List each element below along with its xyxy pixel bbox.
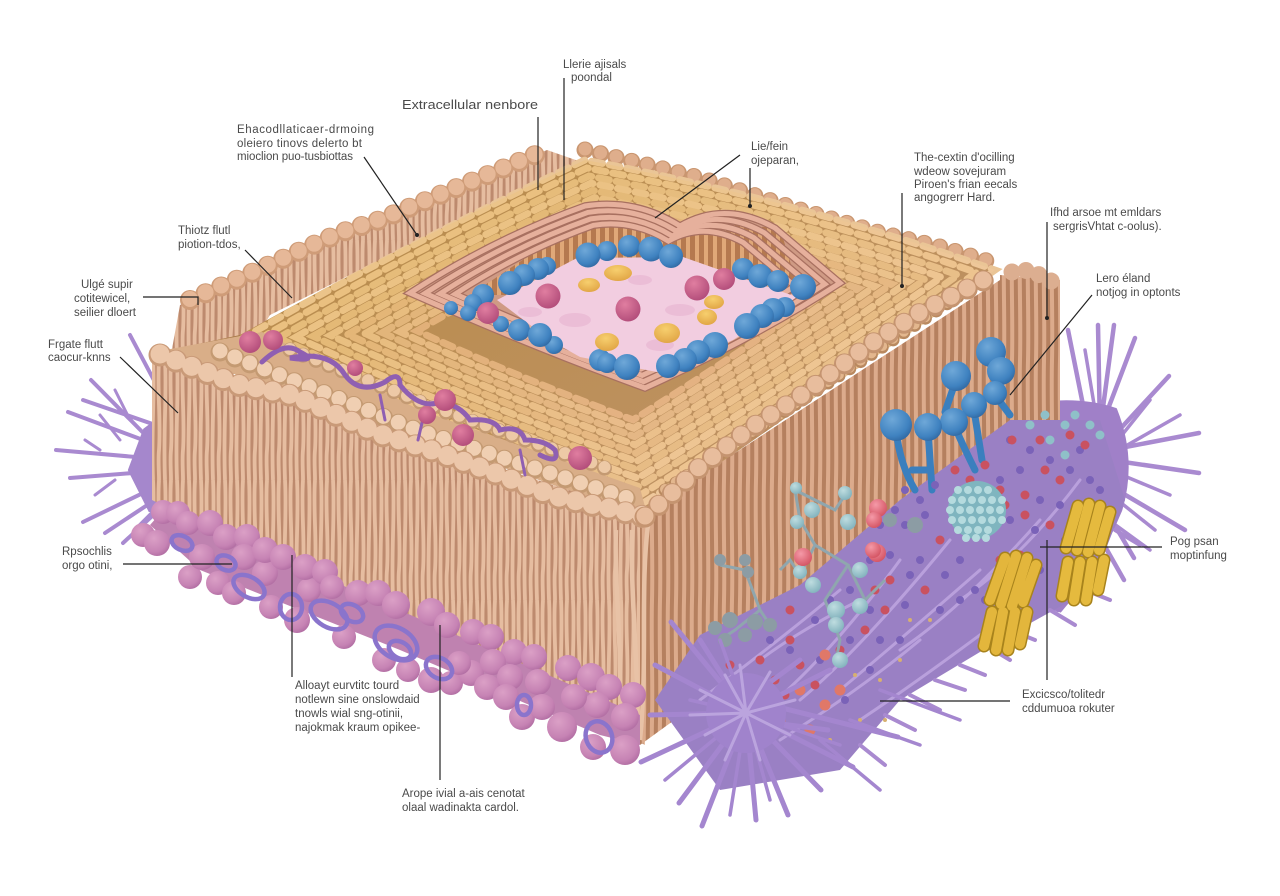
label: base spheres: orgo otini,: [62, 560, 113, 572]
label: left heads: Ulgé supir: [81, 279, 133, 291]
panel: front-left wall of lipid tails: [152, 355, 645, 745]
burst: lower purple receptor spikes: [641, 622, 960, 826]
panel: pink tube folds around the central well: [410, 204, 840, 388]
label: upper right four-line: wdeow sovejuram: [913, 166, 1006, 178]
heads: front-left rim phospholipids: [160, 354, 645, 517]
label: upper left three-line: mioclion puo-tusbiottas: [237, 151, 353, 163]
panel: purple filament mass along right-wall base: [655, 420, 1140, 790]
panel: peach strip behind front bump rows: [165, 332, 648, 518]
heads: front-right rim phospholipids: [645, 279, 985, 517]
leader lines: [120, 78, 1162, 780]
group: yellow block protein upper: [1062, 504, 1110, 600]
label: lower right: Excicsco/tolitedr: [1022, 689, 1105, 701]
label: top right of center: Lie/fein: [751, 141, 788, 153]
label: base rings four-line: tnowls wial sng-otinii,: [295, 708, 403, 720]
label: upper right four-line: angogrerr Hard.: [914, 192, 995, 204]
label: blue proteins: Lero éland: [1096, 273, 1150, 285]
heads: bump rows on the front of the top surface: [220, 284, 975, 503]
group: magenta spheres in the pool: [477, 268, 735, 324]
label: left fluid: caocur-knns: [48, 352, 111, 364]
label: left tails: piotion-tdos,: [178, 239, 241, 251]
label: base rings four-line: Alloayt eurvtitc tourd: [295, 680, 399, 692]
panel: inner well back wall: [470, 215, 800, 295]
panel: back-left wall of lipid tails: [170, 150, 590, 380]
label: left heads: cotitewicel,: [74, 293, 130, 305]
vine: purple protein chain on the top surface: [262, 348, 556, 475]
molecule: grey-teal ball-and-stick clusters: [708, 482, 923, 668]
panel: tube base under the central well: [410, 204, 840, 388]
group: magenta spheres on the vine: [239, 330, 592, 470]
label: base rings four-line: najokmak kraum opikee-: [295, 722, 420, 734]
label: base rings four-line: notlewn sine onslowdaid: [295, 694, 420, 706]
label: bottom center: olaal wadinakta cardol.: [402, 802, 519, 814]
label: lower right: cddumuoa rokuter: [1022, 703, 1115, 715]
group: coloured particles on purple mass: [730, 415, 1100, 740]
group: purple rings among the base spheres: [169, 532, 617, 756]
label: upper left three-line: Ehacodllaticaer-drmoing: [237, 124, 374, 136]
panel: top surface of bilayer with concentric lipid rows: [170, 160, 995, 515]
panel: central pink pool: [497, 257, 797, 372]
heads: back rim phospholipids: [190, 149, 1053, 300]
group: pink spheres along the base: [131, 500, 646, 765]
label: blue proteins: notjog in optonts: [1096, 287, 1181, 299]
group: blue spheres around the pool: [444, 235, 816, 380]
group: yellow block protein lower: [984, 556, 1036, 650]
label: top center: Llerie ajisals: [563, 59, 626, 71]
label: yellow protein: Pog psan: [1170, 536, 1219, 548]
label: upper right four-line: The-cextin d'ocilling: [914, 152, 1015, 164]
panel: front-right wall of lipid tails: [640, 280, 1010, 745]
group: long tails at the front corner: [616, 525, 648, 740]
panel: back-right wall of lipid tails: [1000, 275, 1060, 430]
cluster: teal sphere cluster: [948, 481, 1006, 539]
label: base spheres: Rpsochlis: [62, 546, 112, 558]
burst: right purple receptor spikes: [1000, 325, 1199, 610]
label: yellow protein: moptinfung: [1170, 550, 1227, 562]
label: upper right two-line: sergrisVhtat c-oolus).: [1053, 221, 1162, 233]
label: bottom center: Arope ivial a-ais cenotat: [402, 788, 525, 800]
band: pink underlay along the base: [150, 508, 640, 745]
group: yellow domes in the pool: [578, 265, 724, 351]
label: extracellular: Extracellular nenbore: [402, 98, 538, 112]
label: upper right two-line: Ifhd arsoe mt emldars: [1050, 207, 1161, 219]
label: upper left three-line: oleiero tinovs delerto bt: [237, 138, 363, 150]
burst: left purple receptor spikes: [56, 335, 185, 543]
label: top center: poondal: [571, 72, 612, 84]
label: left heads: seilier dloert: [74, 307, 137, 319]
label: left fluid: Frgate flutt: [48, 339, 103, 351]
group: blue stalked balloon proteins: [880, 337, 1015, 490]
label: upper right four-line: Piroen's frian eecals: [914, 179, 1017, 191]
label: left tails: Thiotz flutl: [178, 225, 230, 237]
label: top right of center: ojeparan,: [751, 155, 799, 167]
